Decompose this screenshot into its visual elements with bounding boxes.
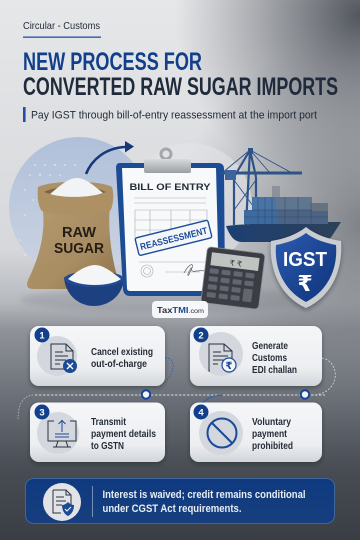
container ship [226, 186, 341, 242]
watermark badge: TaxTMI.com [152, 301, 208, 318]
stamp: reassessment: REASSESSMENT [139, 226, 209, 253]
signature [184, 265, 204, 275]
subtitle: Pay IGST through bill-of-entry reassessment at the import port [31, 110, 317, 122]
clipboard: bill of entry: BILL OF ENTRY [130, 182, 211, 193]
title: NEW PROCESS FOR [23, 48, 202, 76]
sugar sack: SUGAR [54, 240, 104, 257]
step 2 card [190, 326, 322, 386]
step 2 card: EDI challan [252, 364, 297, 376]
eyebrow: circular customs [23, 20, 101, 38]
watermark badge: TaxTMI.com: TaxTMI.com [157, 305, 204, 315]
port crane [220, 148, 302, 225]
badge 2: 2 [198, 330, 204, 342]
icon: document with cross [51, 344, 77, 373]
badge 1: 1 [39, 330, 45, 342]
shield: IGST: ₹ [297, 271, 313, 296]
step 3 card: Transmit [91, 416, 126, 428]
step 4 card: prohibited [252, 440, 293, 452]
form lines and table [134, 198, 207, 277]
step 1 card: out-of-charge [91, 358, 147, 370]
badge 3: 3 [39, 408, 45, 418]
step 2 card: Generate [252, 340, 288, 352]
step 1 card: Cancel existing [91, 346, 153, 358]
step 3 card: to GSTN [91, 440, 124, 452]
sugar sack [27, 178, 118, 289]
backdrop circles [9, 137, 252, 277]
icon: document with rupee: ₹ [226, 361, 233, 372]
callout banner: under CGST Act requirements. [102, 503, 242, 515]
step 4 card [190, 402, 322, 462]
eyebrow: circular customs: Circular - Customs [23, 20, 100, 32]
icon: monitor with upload [48, 420, 76, 447]
shield: IGST: IGST [283, 249, 327, 271]
step 2 card: Customs [252, 352, 287, 364]
step 4 card: Voluntary [252, 416, 291, 428]
shield: IGST [271, 227, 341, 308]
step 4 card: payment [252, 428, 287, 440]
badge 4: 4 [198, 408, 204, 418]
calculator: ₹ ₹ [229, 259, 242, 269]
callout banner [26, 478, 334, 524]
icon: prohibited sign [208, 418, 236, 448]
connector path between steps [18, 358, 335, 420]
clipboard: bill of entry [116, 149, 225, 296]
hero illustration [9, 137, 341, 312]
arrow: sugar to bill of entry [86, 141, 134, 174]
sugar bowl [64, 265, 124, 306]
calculator [201, 247, 265, 309]
icon: document with shield [53, 490, 74, 516]
callout banner: Interest is waived; credit remains conditional [102, 489, 306, 501]
step 1 card [30, 326, 165, 386]
ground reflection [20, 288, 320, 312]
sugar sack: RAW [62, 224, 97, 241]
clip [144, 149, 191, 173]
title [23, 48, 338, 101]
step 3 card [30, 402, 165, 462]
step 3 card: payment details [91, 428, 156, 440]
